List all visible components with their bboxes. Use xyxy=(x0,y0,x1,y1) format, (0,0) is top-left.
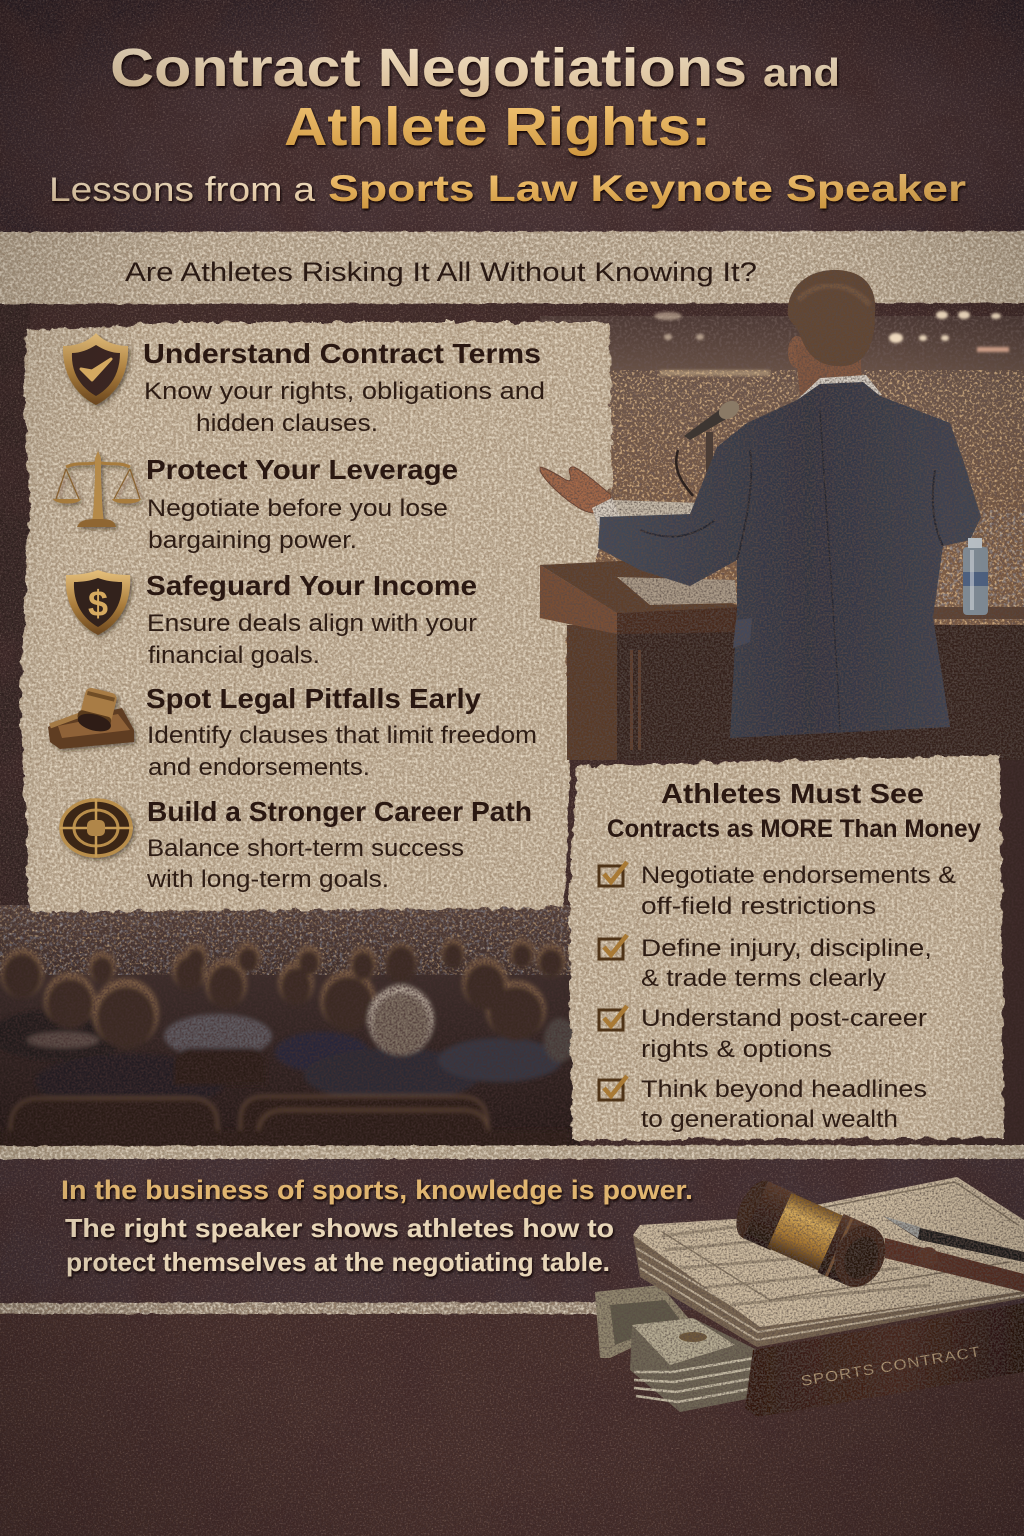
icon: shield with dollar xyxy=(66,570,130,635)
icon: shield with check xyxy=(63,333,128,405)
checklist heading: Athletes Must See xyxy=(661,778,924,809)
lesson 2: protect your leverage: Negotiate before you lose xyxy=(147,495,448,522)
icon: checkbox xyxy=(599,1076,627,1100)
lesson 2: protect your leverage: Protect Your Leverage xyxy=(146,454,458,485)
lesson 5: build a stronger career path: with long-term goals. xyxy=(146,866,389,893)
title: and xyxy=(763,52,840,95)
podium xyxy=(540,560,1024,760)
lesson 5: build a stronger career path xyxy=(60,796,532,893)
money stacks xyxy=(595,1285,757,1412)
lesson 4: spot legal pitfalls: Spot Legal Pitfalls Early xyxy=(146,683,482,714)
closing message xyxy=(61,1175,693,1277)
panel: key lessons xyxy=(20,322,612,912)
book title: SPORTS CONTRACT xyxy=(800,1344,982,1390)
lesson 2: protect your leverage xyxy=(53,451,458,554)
lesson 1: understand contract terms xyxy=(63,333,545,437)
check item 2 xyxy=(599,935,932,992)
speaker xyxy=(540,270,981,738)
check item 2: Define injury, discipline, xyxy=(641,935,932,962)
checklist heading: Contracts as MORE Than Money xyxy=(607,815,981,843)
check item 1: off-field restrictions xyxy=(641,893,876,920)
stadium crowd backdrop xyxy=(540,311,1024,760)
audience heads xyxy=(0,938,566,1055)
title: Sports Law Keynote Speaker xyxy=(328,168,966,209)
title: Contract Negotiations xyxy=(110,38,747,98)
lesson 5: build a stronger career path: Build a Stronger Career Path xyxy=(147,796,532,827)
lesson 3: safeguard your income: financial goals. xyxy=(148,642,320,669)
title: Athlete Rights: xyxy=(284,97,711,157)
gavel xyxy=(728,1174,1024,1295)
paper under arm xyxy=(612,500,700,565)
icon: scales of justice xyxy=(53,451,141,527)
lesson 4: spot legal pitfalls xyxy=(48,683,537,781)
icon: checkbox xyxy=(599,935,627,959)
lesson 4: spot legal pitfalls: and endorsements. xyxy=(148,754,370,781)
check item 2: & trade terms clearly xyxy=(641,965,887,992)
check item 1 xyxy=(599,862,956,920)
check item 3: Understand post-career xyxy=(641,1005,927,1032)
lesson 1: understand contract terms: hidden clauses. xyxy=(196,410,378,437)
icon: checkbox xyxy=(599,1006,627,1030)
check item 4 xyxy=(599,1076,927,1133)
lesson 3: safeguard your income: Ensure deals align with your xyxy=(147,610,477,637)
check item 1: Negotiate endorsements & xyxy=(641,862,956,889)
check item 4: Think beyond headlines xyxy=(641,1076,927,1103)
closing message: In the business of sports, knowledge is power. xyxy=(61,1175,693,1205)
audience seats xyxy=(10,1048,490,1150)
contract pages xyxy=(633,1235,1024,1347)
icon: shield with dollar: $ xyxy=(88,583,108,624)
lesson 1: understand contract terms: Know your rights, obligations and xyxy=(144,378,545,405)
panel: contracts checklist xyxy=(569,755,1004,1140)
check item 3 xyxy=(599,1005,927,1063)
lesson 2: protect your leverage: bargaining power. xyxy=(148,527,357,554)
footer band xyxy=(0,1145,1024,1314)
speaker head xyxy=(788,270,875,395)
lesson 3: safeguard your income xyxy=(66,570,477,669)
shirt cuff xyxy=(592,498,622,532)
lesson 3: safeguard your income: Safeguard Your Income xyxy=(146,570,477,601)
audience shoulders xyxy=(0,1009,576,1110)
lesson 5: build a stronger career path: Balance short-term success xyxy=(147,835,464,862)
checklist heading xyxy=(607,778,981,843)
check item 4: to generational wealth xyxy=(641,1106,898,1133)
question banner xyxy=(0,231,1024,304)
book spine xyxy=(745,1303,1024,1417)
lesson 4: spot legal pitfalls: Identify clauses that limit freedom xyxy=(147,722,537,749)
icon: gavel on book xyxy=(48,686,134,749)
icon: checkbox xyxy=(599,862,627,886)
title: Lessons from a xyxy=(49,171,315,209)
audience photo xyxy=(0,905,580,1150)
speaker jacket xyxy=(598,382,981,738)
shirt collar xyxy=(797,375,882,400)
question banner: Are Athletes Risking It All Without Knowing It? xyxy=(125,257,757,287)
icon: target xyxy=(60,799,133,857)
pen xyxy=(883,1216,1024,1262)
illustration: contract book, gavel and money xyxy=(595,1174,1024,1417)
lower right dark wall xyxy=(940,745,1024,1150)
lesson 1: understand contract terms: Understand Contract Terms xyxy=(143,338,541,369)
water bottle xyxy=(963,538,988,615)
title xyxy=(49,38,966,209)
microphone xyxy=(676,397,743,496)
check item 3: rights & options xyxy=(641,1036,832,1063)
speaker hand xyxy=(540,467,611,513)
closing message: protect themselves at the negotiating table. xyxy=(66,1247,610,1277)
closing message: The right speaker shows athletes how to xyxy=(65,1213,614,1243)
